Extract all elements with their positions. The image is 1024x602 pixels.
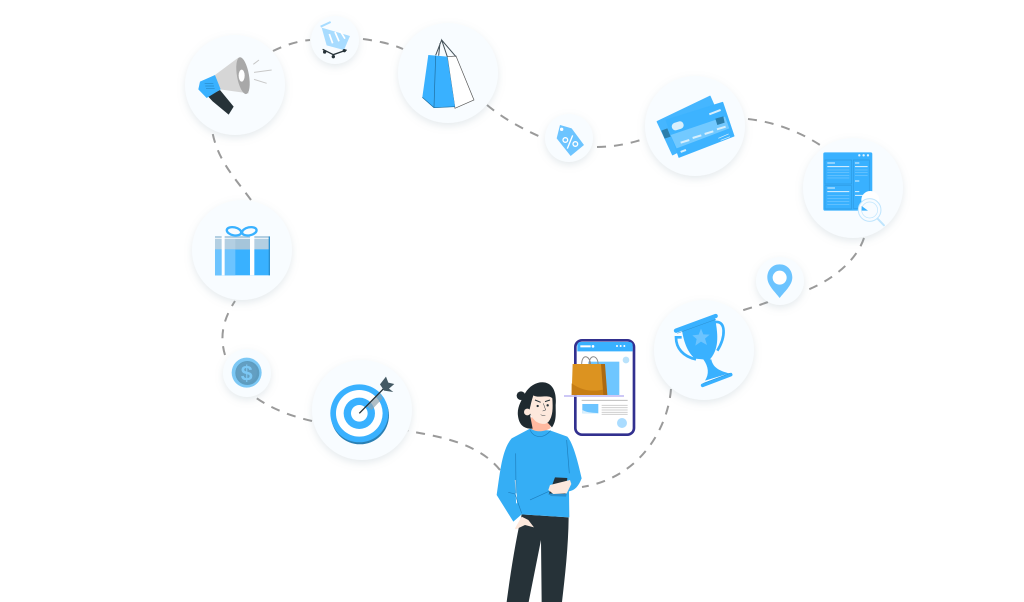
circle: location pin xyxy=(756,257,804,305)
icon: dollar coin: $ xyxy=(241,361,253,385)
circle: credit cards xyxy=(645,76,745,176)
face xyxy=(529,395,553,424)
icon: megaphone xyxy=(198,56,272,115)
icon: discount tag xyxy=(557,125,584,156)
icon: trophy xyxy=(676,316,731,385)
dashed journey path xyxy=(212,39,864,487)
circle: coin xyxy=(223,349,271,397)
icon: gift box xyxy=(215,226,270,275)
circle: shopping cart xyxy=(311,16,359,64)
trousers xyxy=(507,514,569,602)
hair xyxy=(518,382,556,429)
icon: shopping bags xyxy=(422,40,474,108)
neck xyxy=(530,417,551,431)
icon: location pin xyxy=(767,264,792,298)
circle: document search xyxy=(803,138,903,238)
icon: document with magnifier xyxy=(823,152,884,225)
circle: shopping bags xyxy=(398,23,498,123)
character: person with phone xyxy=(497,382,582,602)
hand in pocket xyxy=(515,517,534,529)
circle: gift xyxy=(192,200,292,300)
circle: target xyxy=(312,360,412,460)
circle: megaphone xyxy=(185,35,285,135)
icon: credit cards xyxy=(657,96,734,157)
circle: discount tag xyxy=(545,114,593,162)
phone xyxy=(549,477,567,495)
phone screen: shop app xyxy=(564,340,634,435)
circle: trophy xyxy=(654,300,754,400)
shirt xyxy=(497,429,582,522)
icon: target with dart xyxy=(330,377,394,444)
icon: shopping cart xyxy=(321,22,350,58)
